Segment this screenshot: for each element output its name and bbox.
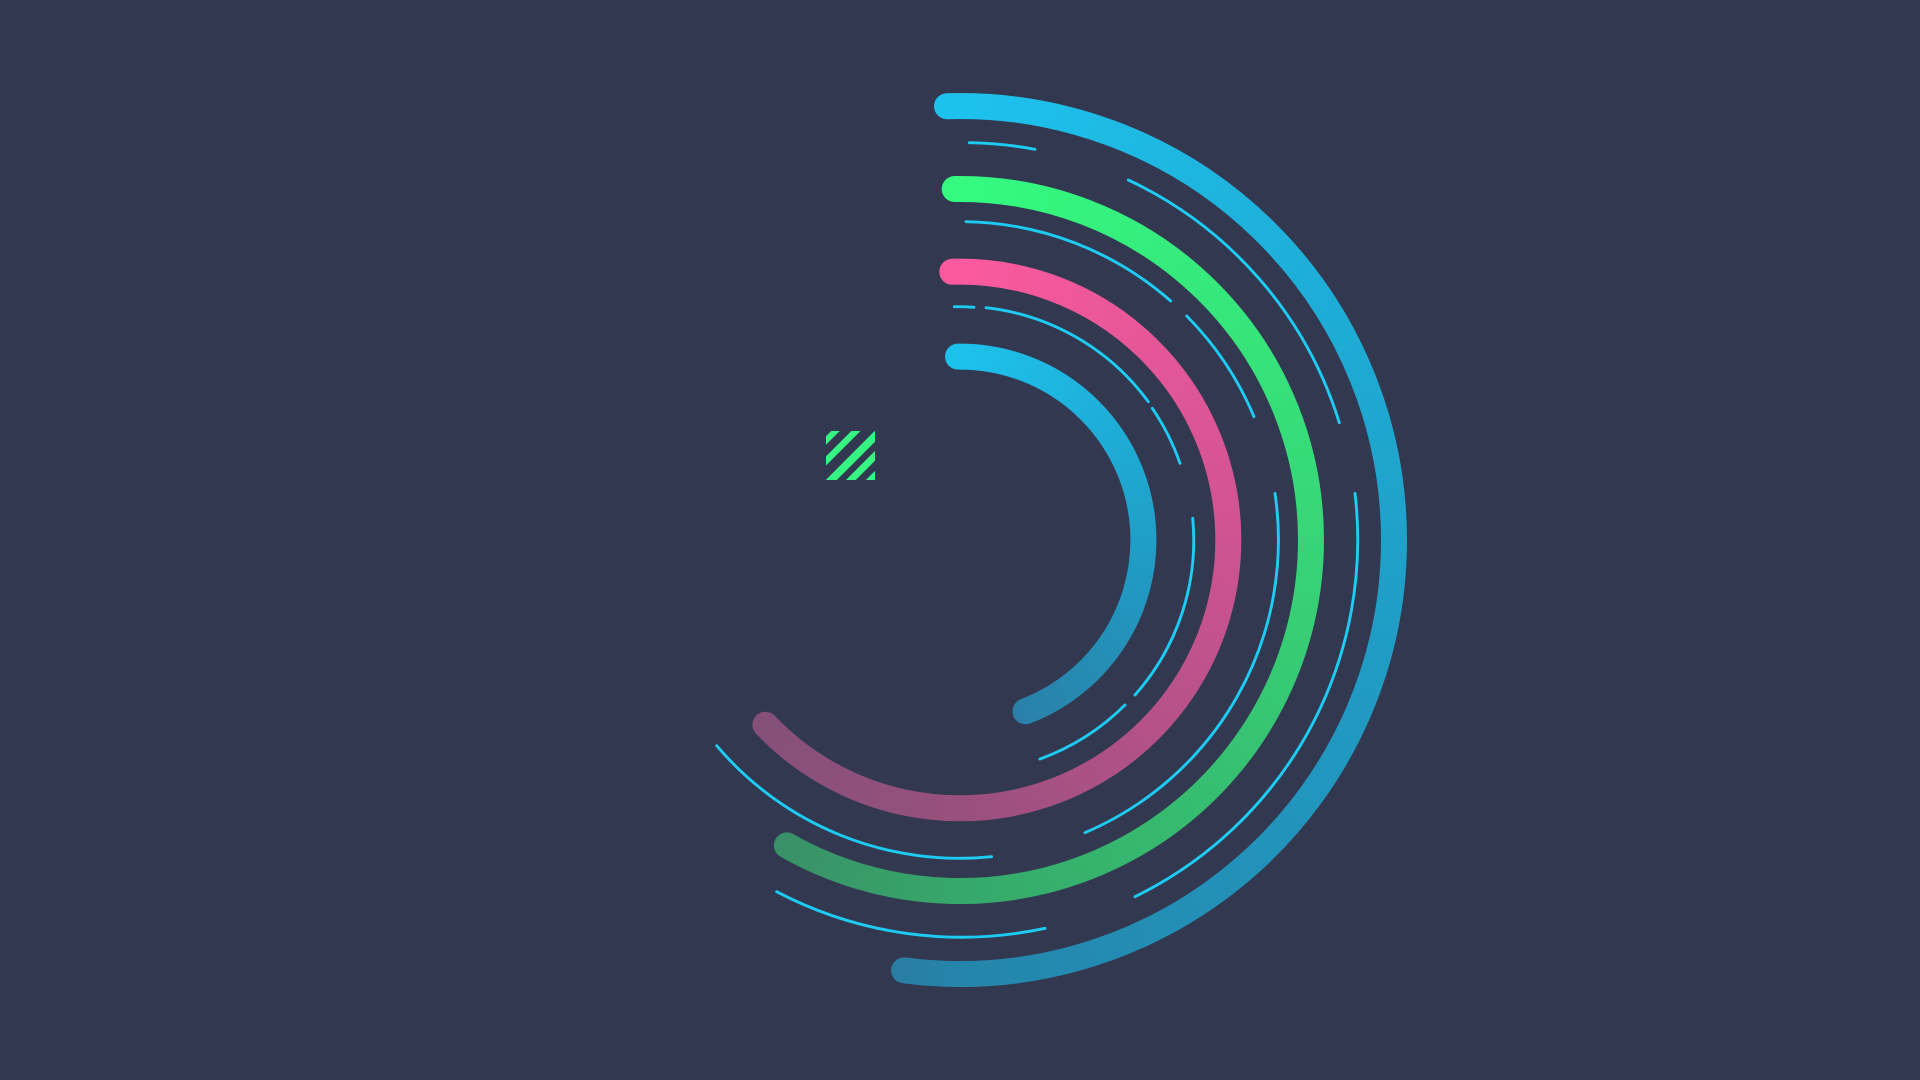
thin arcs: middle track — [717, 222, 1278, 858]
arc: green ring — [774, 176, 1324, 904]
arc: inner blue ring — [945, 344, 1156, 724]
radial arc chart — [715, 93, 1407, 988]
thin arcs: inner track — [954, 307, 1194, 759]
arc: outer blue ring — [891, 93, 1407, 988]
thin arcs: outer track — [777, 143, 1358, 937]
arc: pink ring — [752, 258, 1242, 822]
icon: hatched green square — [826, 431, 875, 480]
